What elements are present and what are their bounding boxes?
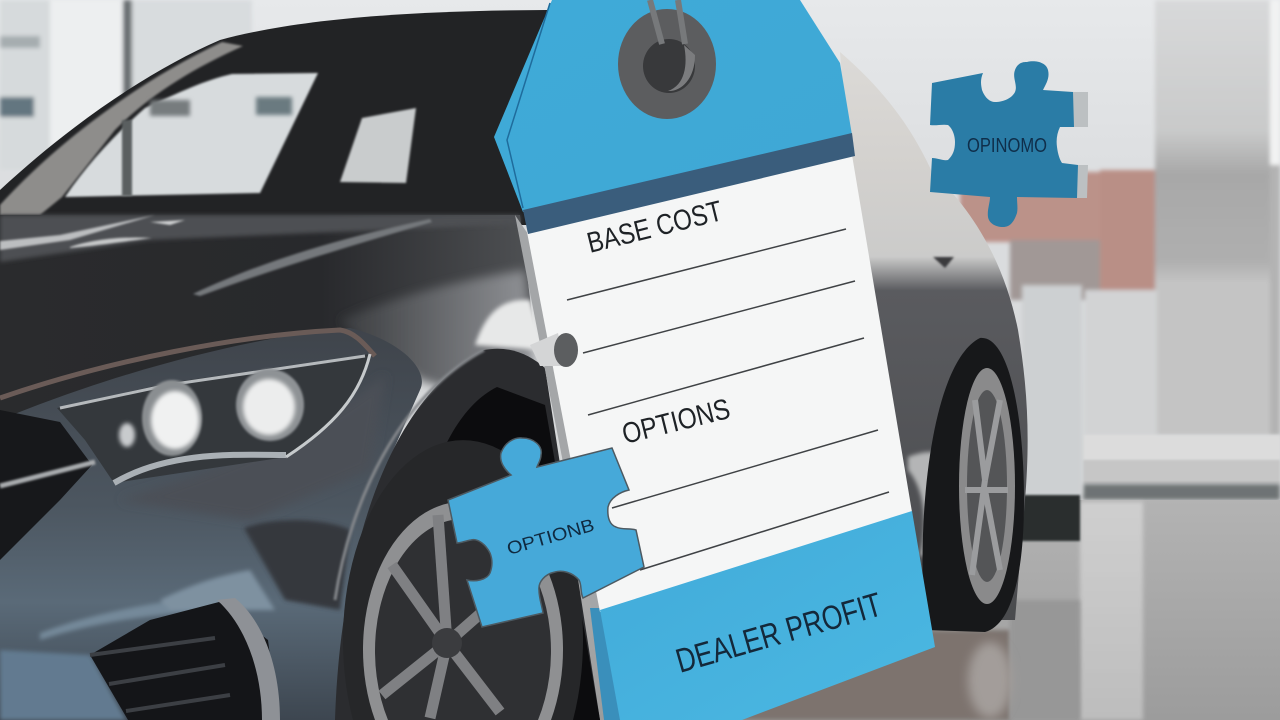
reflections in window — [150, 97, 292, 116]
piece text: OPTIONB — [505, 515, 597, 559]
tag left bevel — [515, 215, 600, 612]
piece text: OPINOMO — [967, 135, 1047, 157]
puzzle piece: lower options — [448, 438, 644, 627]
tag lower blue lip — [590, 608, 622, 720]
tag upper blue — [494, 0, 852, 212]
floor reflection — [968, 642, 1012, 718]
hood top sheen — [0, 215, 520, 262]
piece face — [930, 61, 1078, 227]
door handle — [933, 257, 954, 268]
tag navy band — [523, 133, 855, 234]
reflection on bumper — [244, 520, 350, 610]
inner arch — [400, 387, 600, 720]
showroom floor — [560, 500, 1280, 720]
label: base cost: BASE COST — [584, 195, 726, 260]
front wheel — [343, 440, 583, 720]
fender sheen — [340, 270, 540, 420]
bumper highlights — [0, 570, 275, 720]
tag white body — [527, 155, 912, 612]
rear silver trim — [908, 452, 946, 565]
tag eyelet — [618, 0, 716, 119]
car rear panel — [840, 52, 1028, 620]
tag side notch — [530, 333, 578, 367]
label: options: OPTIONS — [619, 393, 733, 451]
car roof — [0, 10, 560, 225]
pillar beside car — [1020, 285, 1082, 541]
headlight — [57, 354, 370, 483]
window front — [65, 73, 318, 197]
tag lines — [567, 229, 889, 570]
arch light edge — [335, 350, 484, 600]
hood — [0, 215, 535, 420]
accent line — [0, 330, 375, 398]
front fascia — [0, 328, 422, 720]
fascia upper sheen — [120, 375, 385, 520]
car — [0, 10, 1028, 720]
tag bottom blue — [600, 511, 935, 720]
window rear — [340, 108, 416, 183]
windshield pillar — [0, 42, 243, 215]
piece side bevel — [1065, 92, 1088, 198]
tag inner edge line — [507, 3, 550, 208]
fender highlight — [475, 300, 545, 350]
label: dealer profit: DEALER PROFIT — [672, 586, 886, 681]
wheel arch — [335, 349, 600, 720]
grille chrome bar — [0, 462, 95, 486]
price tag — [494, 0, 935, 720]
rear wheel — [922, 338, 1024, 632]
bumper vent — [90, 598, 280, 720]
hood highlights — [0, 215, 432, 296]
grille — [0, 410, 92, 560]
post through window — [122, 120, 132, 196]
puzzle piece: upper option — [930, 61, 1088, 227]
